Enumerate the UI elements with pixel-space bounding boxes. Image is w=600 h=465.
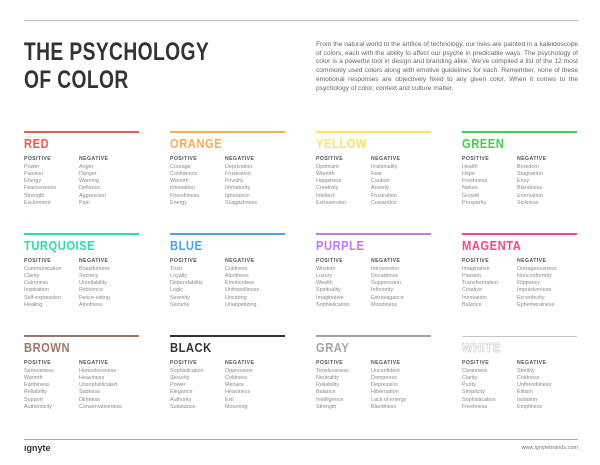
panel: green: Freshness xyxy=(462,178,487,184)
panel: red: Passion xyxy=(24,171,43,177)
panel: green: Hope xyxy=(462,171,475,177)
panel: purple: Decadence xyxy=(371,273,398,279)
panel: black: Substance xyxy=(170,404,195,410)
panel: green: Boredom xyxy=(517,164,539,170)
panel: white: Emptiness xyxy=(517,404,542,410)
panel: gray: Neutrality xyxy=(316,375,339,381)
panel: blue: Dependability xyxy=(170,280,203,286)
panel: blue xyxy=(170,233,285,308)
panel: gray: Depression xyxy=(371,382,398,388)
panel: white: Coldness xyxy=(517,375,539,381)
panel: magenta: MAGENTA xyxy=(462,238,521,253)
panel: black: Power xyxy=(170,382,185,388)
panel: magenta: Passion xyxy=(462,273,481,279)
panel: brown: Earthiness xyxy=(24,382,49,388)
panel: magenta: Innovation xyxy=(462,295,487,301)
panel: gray: NEGATIVE xyxy=(371,360,400,366)
panel: blue: Unfriendliness xyxy=(225,287,259,293)
panel: turquoise xyxy=(24,233,139,308)
panel: brown: NEGATIVE xyxy=(79,360,108,366)
panel: green: Blandness xyxy=(517,185,542,191)
panel: blue: Security xyxy=(170,302,189,308)
panel: gray: Balance xyxy=(316,389,335,395)
panel: blue: Aloofness xyxy=(225,273,249,279)
panel: gray: Intelligence xyxy=(316,397,343,403)
panel: white: Clarity xyxy=(462,375,477,381)
panel: turquoise: Healing xyxy=(24,302,42,308)
panel: white: Freshness xyxy=(462,404,487,410)
panel: orange: Warmth xyxy=(170,178,189,184)
panel: orange: Frustration xyxy=(225,171,251,177)
panel: red: Fearlessness xyxy=(24,185,56,191)
panel: purple: PURPLE xyxy=(316,238,364,253)
panel: magenta: Creative xyxy=(462,287,482,293)
panel: brown: BROWN xyxy=(24,340,70,355)
panel: turquoise: Secrecy xyxy=(79,273,98,279)
panel: magenta: Transformation xyxy=(462,280,498,286)
panel: gray: GRAY xyxy=(316,340,349,355)
panel: black: Mourning xyxy=(225,404,247,410)
panel: orange: POSITIVE xyxy=(170,156,197,162)
panel: black: BLACK xyxy=(170,340,212,355)
panel: black: Menace xyxy=(225,382,244,388)
panel: yellow: Caution xyxy=(371,178,390,184)
title xyxy=(24,38,209,94)
panel: purple xyxy=(316,233,431,308)
panel: orange: NEGATIVE xyxy=(225,156,254,162)
panel: purple: Introversion xyxy=(371,266,399,272)
panel: brown: Seriousness xyxy=(24,368,54,374)
panel: red: NEGATIVE xyxy=(79,156,108,162)
panel: gray: Hibernation xyxy=(371,389,399,395)
panel: yellow: POSITIVE xyxy=(316,156,343,162)
panel: yellow: NEGATIVE xyxy=(371,156,400,162)
panel: magenta: Impulsiveness xyxy=(517,287,551,293)
panel: black: Sophistication xyxy=(170,368,204,374)
panel: orange: Deprivation xyxy=(225,164,252,170)
panel: purple: Wealth xyxy=(316,280,333,286)
panel: red: Defiance xyxy=(79,185,100,191)
panel: magenta: Balance xyxy=(462,302,481,308)
panel: orange: Immaturity xyxy=(225,185,250,191)
panel: yellow: YELLOW xyxy=(316,136,367,151)
panel: green: Envy xyxy=(517,178,529,184)
panel: red: Anger xyxy=(79,164,93,170)
panel: purple: Sophistication xyxy=(316,302,350,308)
panel: red: Warning xyxy=(79,178,99,184)
panel: brown: Dirtiness xyxy=(79,397,100,403)
panel: green: NEGATIVE xyxy=(517,156,546,162)
panel: purple: Spirituality xyxy=(316,287,341,293)
panel: purple: NEGATIVE xyxy=(371,258,400,264)
panel: magenta: Ephemeralness xyxy=(517,302,554,308)
panel: brown: Sadness xyxy=(79,389,100,395)
panel: turquoise: Unreliability xyxy=(79,280,107,286)
panel: brown: Authenticity xyxy=(24,404,52,410)
panel: orange: Sluggishness xyxy=(225,200,257,206)
panel: magenta: Imaginative xyxy=(462,266,490,272)
panel: red: Danger xyxy=(79,171,97,177)
panel: yellow: Creativity xyxy=(316,185,338,191)
panel: yellow: Anxiety xyxy=(371,185,389,191)
panel: white: WHITE xyxy=(462,340,501,355)
panel: blue: Unappetizing xyxy=(225,302,256,308)
panel: purple: Luxury xyxy=(316,273,332,279)
panel: brown: Unsophisticated xyxy=(79,382,117,388)
panel: turquoise: Self-expression xyxy=(24,295,61,301)
panel: white: Cleanness xyxy=(462,368,487,374)
panel: gray: Timelessness xyxy=(316,368,349,374)
panel: magenta: POSITIVE xyxy=(462,258,489,264)
panel: green: GREEN xyxy=(462,136,504,151)
panel: white xyxy=(462,336,577,410)
panel: white: Isolation xyxy=(517,397,537,403)
panel: yellow: Optimism xyxy=(316,164,339,170)
panel: black: NEGATIVE xyxy=(225,360,254,366)
panel: blue: Uncaring xyxy=(225,295,247,301)
panel: turquoise: Inspiration xyxy=(24,287,49,293)
panel: white: Sterility xyxy=(517,368,535,374)
panel: black: Heaviness xyxy=(225,389,250,395)
panel: blue: Loyalty xyxy=(170,273,187,279)
panel: purple: Imaginative xyxy=(316,295,344,301)
website url: www.ignytebrands.com xyxy=(521,445,578,451)
panel: orange: Energy xyxy=(170,200,187,206)
panel: orange: Friendliness xyxy=(170,193,199,199)
panel: magenta: Nonconformity xyxy=(517,273,552,279)
panel: magenta: Flippancy xyxy=(517,280,540,286)
panel: brown: POSITIVE xyxy=(24,360,51,366)
panel: turquoise: NEGATIVE xyxy=(79,258,108,264)
panel: orange: Ignorance xyxy=(225,193,249,199)
panel: white: Unfriendliness xyxy=(517,382,551,388)
panel: black: Elegance xyxy=(170,389,192,395)
panel: blue: Coldness xyxy=(225,266,247,272)
panel: blue: Emotionless xyxy=(225,280,254,286)
panel: white: Elitism xyxy=(517,389,533,395)
panel: white: NEGATIVE xyxy=(517,360,546,366)
panel: black: Evil xyxy=(225,397,234,403)
panel: turquoise: Aloofness xyxy=(79,302,103,308)
panel: brown xyxy=(24,335,139,410)
panel: green: Growth xyxy=(462,193,479,199)
panel: blue: NEGATIVE xyxy=(225,258,254,264)
panel: turquoise: Calmness xyxy=(24,280,48,286)
title: OF COLOR xyxy=(24,66,129,94)
panel: black: Authority xyxy=(170,397,191,403)
panel: blue: Serenity xyxy=(170,295,190,301)
panel: brown: Heaviness xyxy=(79,375,104,381)
panel: green: Nature xyxy=(462,185,478,191)
panel: yellow: Fear xyxy=(371,171,382,177)
panel: brown: Humorlessness xyxy=(79,368,116,374)
logo: ignyte: ıgnyte xyxy=(24,443,51,453)
panel: gray: Blandness xyxy=(371,404,396,410)
panel: turquoise: Reticence xyxy=(79,287,103,293)
panel: yellow: Frustration xyxy=(371,193,397,199)
panel: green: POSITIVE xyxy=(462,156,489,162)
panel: turquoise: Communication xyxy=(24,266,61,272)
panel: red: Aggression xyxy=(79,193,106,199)
panel: black: Security xyxy=(170,375,189,381)
panel: black xyxy=(170,335,285,410)
panel: yellow: Irrationality xyxy=(371,164,397,170)
panel: orange xyxy=(170,131,285,206)
panel: brown: Warmth xyxy=(24,375,43,381)
panel: yellow: Cowardice xyxy=(371,200,396,206)
panel: black: Oppression xyxy=(225,368,253,374)
panel: orange: Frivolity xyxy=(225,178,244,184)
panel: yellow: Happiness xyxy=(316,178,341,184)
panel: turquoise: POSITIVE xyxy=(24,258,51,264)
panel: red: POSITIVE xyxy=(24,156,51,162)
panel: blue: POSITIVE xyxy=(170,258,197,264)
panel: purple: Inferiority xyxy=(371,287,393,293)
panel: green xyxy=(462,131,577,206)
panel: red xyxy=(24,131,139,206)
panel: blue: Logic xyxy=(170,287,183,293)
panel: green: Enervation xyxy=(517,193,543,199)
panel: magenta xyxy=(462,233,577,308)
panel: red: Pain xyxy=(79,200,90,206)
panel: yellow: Intellect xyxy=(316,193,335,199)
panel: black: POSITIVE xyxy=(170,360,197,366)
panel: gray xyxy=(316,335,431,410)
panel: gray: POSITIVE xyxy=(316,360,343,366)
panel: turquoise: TURQUOISE xyxy=(24,238,95,253)
panel: red: Energy xyxy=(24,178,41,184)
panel: blue: Trust xyxy=(170,266,182,272)
panel: white: Sophistication xyxy=(462,397,496,403)
panel: gray: Unconfident xyxy=(371,368,400,374)
panel: white: Purity xyxy=(462,382,476,388)
panel: yellow: Warmth xyxy=(316,171,335,177)
panel: turquoise: Clarity xyxy=(24,273,39,279)
panel: green: Sickness xyxy=(517,200,539,206)
panel: gray: Lack of energy xyxy=(371,397,406,403)
panel: yellow xyxy=(316,131,431,206)
panel: magenta: NEGATIVE xyxy=(517,258,546,264)
panel: blue: BLUE xyxy=(170,238,203,253)
panel: orange: Confidence xyxy=(170,171,197,177)
panel: brown: Reliability xyxy=(24,389,47,395)
panel: purple: Suppression xyxy=(371,280,401,286)
panel: magenta: Eccentricity xyxy=(517,295,545,301)
panel: red: RED xyxy=(24,136,49,151)
panel: green: Prosperity xyxy=(462,200,486,206)
panel: brown: Conservativeness xyxy=(79,404,122,410)
intro text: From the natural world to the artifice of technology, our lives are painted in a kaleidoscope of colors, each with the ability to affect our psyche in predicable ways. The psychology of color is a powerful tool in design and branding alike. We've compiled a list of the 12 most commonly used colors along with emotive guidelines for each. Remember, none of these emotional responses are objectively fixed to any given color. When it comes to the psychology of color, context and culture matter. xyxy=(316,41,578,92)
panel: white: Simplicity xyxy=(462,389,485,395)
panel: yellow: Extraversion xyxy=(316,200,346,206)
panel: orange: Innovation xyxy=(170,185,195,191)
panel: turquoise: Fence-sitting xyxy=(79,295,110,301)
panel: purple: Wisdom xyxy=(316,266,335,272)
title: THE PSYCHOLOGY xyxy=(24,38,209,66)
panel: black: Coldness xyxy=(225,375,247,381)
panel: orange: ORANGE xyxy=(170,136,222,151)
panel: turquoise: Boastfulness xyxy=(79,266,110,272)
panel: green: Health xyxy=(462,164,478,170)
panel: gray: Reliability xyxy=(316,382,339,388)
panel: purple: Extravagance xyxy=(371,295,404,301)
panel: red: Power xyxy=(24,164,39,170)
panel: gray: Dampness xyxy=(371,375,397,381)
panel: orange: Courage xyxy=(170,164,191,170)
panel: magenta: Outrageousness xyxy=(517,266,557,272)
panel: red: Excitement xyxy=(24,200,51,206)
panel: green: Stagnation xyxy=(517,171,543,177)
panel: white: POSITIVE xyxy=(462,360,489,366)
panel: purple: POSITIVE xyxy=(316,258,343,264)
panel: gray: Strength xyxy=(316,404,336,410)
panel: red: Strength xyxy=(24,193,44,199)
panel: purple: Moodiness xyxy=(371,302,397,308)
panel: brown: Support xyxy=(24,397,43,403)
